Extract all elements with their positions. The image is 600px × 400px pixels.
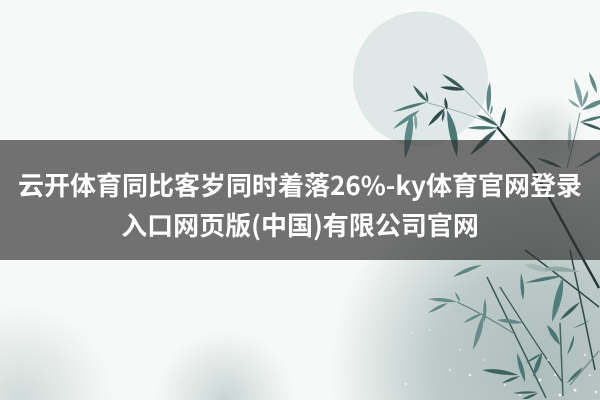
title bbox=[18, 166, 582, 243]
title band bbox=[0, 140, 600, 260]
bamboo: upper sprig leaves bbox=[393, 72, 600, 168]
pale mist behind right sprig bbox=[503, 93, 587, 177]
snow speckles bbox=[405, 329, 597, 396]
bamboo: stems bbox=[428, 90, 599, 398]
title: 入口网页版(中国)有限公司官网 bbox=[121, 206, 479, 243]
moon bbox=[353, 12, 488, 146]
title: 云开体育同比客岁同时着落26%-ky体育官网登录 bbox=[18, 166, 582, 203]
lower mist bbox=[0, 160, 600, 400]
bamboo: leaves under the band bbox=[428, 264, 590, 399]
